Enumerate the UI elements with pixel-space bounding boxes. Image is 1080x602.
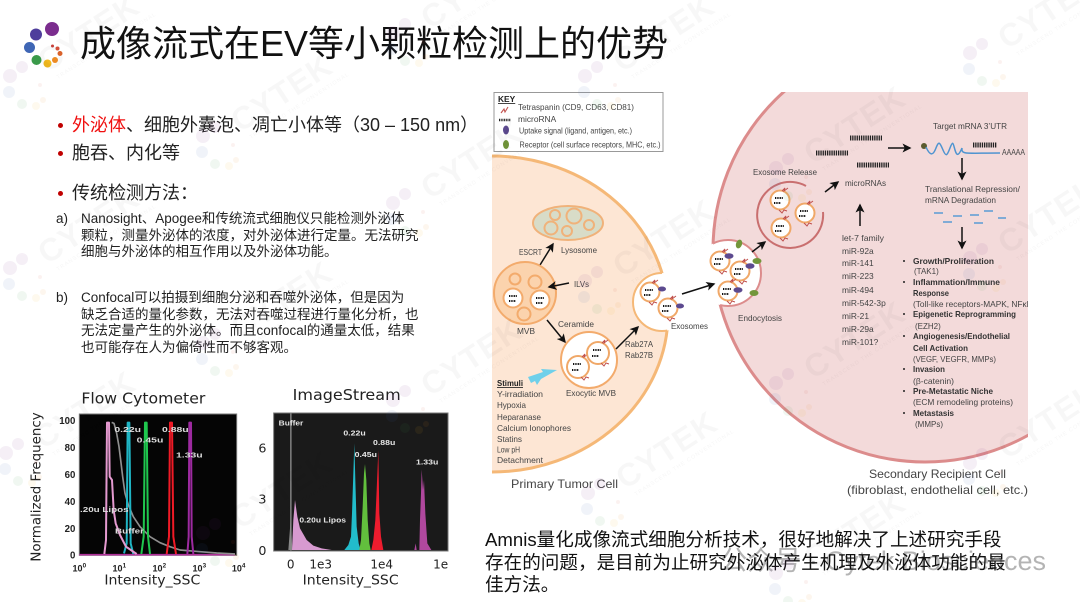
imagestream peak labels: 0.45u xyxy=(355,452,377,459)
cellular outcomes list xyxy=(903,256,1035,429)
rab27 arrow: Rab27B xyxy=(625,350,653,360)
exosome notch outline xyxy=(632,272,668,332)
source watermark: 公众号 · Cytek Biosciences xyxy=(720,546,1046,576)
cellular outcomes list: Inflammation/Immune xyxy=(913,277,1000,287)
arrow to exosome release xyxy=(752,242,765,252)
stimuli list: Y-irradiation xyxy=(497,389,543,399)
flow cytometer curves xyxy=(79,422,235,555)
imagestream peak labels: 0.20u Lipos xyxy=(299,518,346,525)
imagestream chart xyxy=(258,386,448,588)
method a text: Nanosight、Apogee和传统流式细胞仪只能检测外泌体 xyxy=(81,211,404,226)
stimuli list: Statins xyxy=(497,434,522,444)
flow cytometer peak labels: 0.22u xyxy=(114,425,141,434)
method b text: Confocal可以拍摄到细胞分泌和吞噬外泌体，但是因为 xyxy=(81,290,404,305)
ESCRT arrow xyxy=(519,244,553,265)
bullet list: 传统检测方法： xyxy=(72,183,198,203)
miRNA list: miR-223 xyxy=(842,271,874,281)
key box: Tetraspanin (CD9, CD63, CD81) xyxy=(518,102,634,112)
rab27 arrow xyxy=(616,327,653,360)
ILVs arrow xyxy=(549,279,589,289)
key box: Receptor (cell surface receptors, MHC, etc.) xyxy=(520,140,661,150)
secondary recipient cell xyxy=(712,92,1028,464)
arrow to target mRNA xyxy=(888,147,910,149)
endocytosis notch xyxy=(712,241,760,305)
flow cytometer peak labels: 0.45u xyxy=(137,436,164,445)
cellular outcomes list: (MMPs) xyxy=(915,420,943,429)
method a text xyxy=(56,211,418,259)
arrow to microRNAs xyxy=(825,182,838,192)
logo xyxy=(24,22,62,68)
flow cytometer peak labels: Buffer xyxy=(115,526,144,535)
miRNA list: miR-141 xyxy=(842,258,874,268)
flow cytometer heading: Flow Cytometer xyxy=(81,389,206,407)
flow cytometer y ticks: 40 xyxy=(65,497,75,508)
ESCRT arrow: ESCRT xyxy=(519,247,542,257)
imagestream peak labels: 0.88u xyxy=(373,440,395,447)
imagestream peak labels: 0.22u xyxy=(343,430,366,437)
key box: KEY xyxy=(498,94,516,104)
icon: stimuli lightning xyxy=(528,369,557,385)
conclusion text: Amnis量化成像流式细胞分析技术，很好地解决了上述研究手段 xyxy=(485,529,1002,550)
flow cytometer x ticks: 2 xyxy=(163,563,167,570)
stimuli list xyxy=(497,378,571,465)
imagestream histograms xyxy=(288,413,431,550)
method a text: 细胞与外泌体的相互作用以及外泌体功能。 xyxy=(81,244,338,259)
cellular outcomes list: Growth/Proliferation xyxy=(913,256,994,266)
secondary recipient cell label: (fibroblast, endothelial cell, etc.) xyxy=(847,483,1028,497)
imagestream x ticks: 1e4 xyxy=(370,558,393,572)
flow cytometer y ticks: 80 xyxy=(65,443,75,454)
key box xyxy=(494,92,663,152)
flow cytometer x ticks: 10 xyxy=(193,563,203,573)
imagestream peak labels xyxy=(279,421,438,525)
miRNA list: miR-29a xyxy=(842,324,874,334)
cellular outcomes list: (TAK1) xyxy=(914,267,939,276)
cellular outcomes list: Metastasis xyxy=(913,408,954,418)
flow cytometer x axis label: Intensity_SSC xyxy=(104,573,200,588)
cellular outcomes list: Pre-Metastatic Niche xyxy=(913,386,993,396)
imagestream y ticks: 3 xyxy=(258,492,266,507)
bullet list: 外泌体、细胞外囊泡、凋亡小体等（30 – 150 nm） xyxy=(72,115,478,135)
cellular outcomes list: (ECM remodeling proteins) xyxy=(913,397,1013,407)
imagestream plot area xyxy=(274,413,448,551)
key box: Uptake signal (ligand, antigen, etc.) xyxy=(519,126,632,136)
lysosome: Lysosome xyxy=(561,245,597,255)
endocytosis notch outline xyxy=(713,239,762,307)
imagestream x ticks: 1e3 xyxy=(309,558,332,572)
stimuli list: Detachment xyxy=(497,455,544,465)
flow cytometer x ticks: 4 xyxy=(242,563,246,570)
imagestream y ticks: 0 xyxy=(258,543,266,558)
stimuli list: Hypoxia xyxy=(497,400,526,410)
exosomes xyxy=(640,280,708,331)
flow cytometer x ticks: 10 xyxy=(73,563,83,573)
arrow to outcomes xyxy=(961,227,963,248)
conclusion text: 存在的问题，是目前为止研究外泌体产生机理及外泌体功能的最 xyxy=(485,552,1006,572)
method b text: b) xyxy=(56,290,68,305)
imagestream y ticks: 6 xyxy=(258,440,266,455)
imagestream peak labels: Buffer xyxy=(279,421,304,428)
flow cytometer y ticks: 100 xyxy=(59,416,75,427)
exosome release xyxy=(753,167,823,248)
flow cytometer chart xyxy=(30,389,246,588)
cellular outcomes list: (β-catenin) xyxy=(913,376,954,386)
cellular outcomes list: Angiogenesis/Endothelial xyxy=(913,331,1010,341)
endocytosis: Endocytosis xyxy=(738,313,782,323)
cellular outcomes list: (EZH2) xyxy=(915,322,941,331)
lysosome xyxy=(533,206,603,255)
flow cytometer peak labels: 1.33u xyxy=(176,451,203,460)
translational repression: mRNA Degradation xyxy=(925,195,996,205)
miRNA list: miR-101? xyxy=(842,337,879,347)
flow cytometer y ticks: 0 xyxy=(70,551,75,562)
microRNAs: microRNAs xyxy=(845,178,886,188)
primary tumor cell xyxy=(492,154,669,474)
flow cytometer y ticks: 20 xyxy=(65,524,75,535)
target mRNA xyxy=(921,121,1025,157)
method b text xyxy=(56,290,418,354)
bullet list xyxy=(58,115,478,203)
imagestream x axis label: Intensity_SSC xyxy=(303,573,399,588)
bullet list: 胞吞、内化等 xyxy=(72,143,180,163)
method a text: 颗粒，测量外泌体的浓度，对外泌体进行定量。无法研究 xyxy=(81,228,418,242)
flow cytometer x ticks: 10 xyxy=(153,563,163,573)
flow cytometer y ticks: 60 xyxy=(65,470,75,481)
ceramide arrow xyxy=(547,319,594,342)
imagestream peak labels: 1.33u xyxy=(416,460,438,467)
flow cytometer peak labels xyxy=(80,425,203,535)
miRNA list: miR-542-3p xyxy=(842,298,886,308)
MVB: MVB xyxy=(517,326,535,336)
translational repression: Translational Repression/ xyxy=(925,184,1021,194)
exosome biology diagram xyxy=(492,92,1028,496)
stimuli list: Calcium Ionophores xyxy=(497,423,571,433)
stimuli list: Stimuli xyxy=(497,378,523,388)
flow cytometer y ticks xyxy=(59,416,75,562)
exocytic MVB: Exocytic MVB xyxy=(566,388,616,398)
target mRNA: AAAAA xyxy=(1002,147,1025,157)
cellular outcomes list: (Toll-like receptors-MAPK, NFκB) xyxy=(913,299,1035,309)
secondary recipient cell label: Secondary Recipient Cell xyxy=(869,467,1006,481)
method b text: 缺乏合适的量化参数，无法对吞噬过程进行量化分析，也 xyxy=(81,306,418,322)
secondary recipient cell label xyxy=(847,467,1028,497)
exosomes: Exosomes xyxy=(671,321,708,331)
conclusion text xyxy=(485,529,1006,595)
arrow from miRNA list xyxy=(859,205,861,226)
cellular outcomes list: Epigenetic Reprogramming xyxy=(913,309,1016,319)
conclusion text: 佳方法。 xyxy=(485,574,559,595)
method b text: 无法定量产生的外泌体。而且confocal的通量太低，结果 xyxy=(81,323,415,338)
cellular outcomes list: Invasion xyxy=(913,364,945,374)
stimuli list: Low pH xyxy=(497,444,520,454)
flow cytometer x ticks: 1 xyxy=(123,563,127,570)
flow cytometer x ticks: 3 xyxy=(203,563,207,570)
miRNA list: miR-494 xyxy=(842,285,874,295)
method b text: 也可能存在人为偏倚性而不够客观。 xyxy=(81,340,297,354)
exocytic MVB xyxy=(561,332,617,398)
miRNA list xyxy=(842,233,886,347)
flow cytometer x ticks: 10 xyxy=(232,563,242,573)
arrow to repression xyxy=(961,158,963,179)
exosome release: Exosome Release xyxy=(753,167,817,177)
translational repression xyxy=(925,184,1021,223)
key box: microRNA xyxy=(518,114,557,124)
primary tumor cell label: Primary Tumor Cell xyxy=(511,477,618,491)
imagestream x ticks: 1e xyxy=(433,558,448,572)
ILVs arrow: ILVs xyxy=(574,279,589,289)
imagestream x ticks: 0 xyxy=(287,558,294,572)
MVB xyxy=(494,262,556,336)
flow cytometer y axis label: Normalized Frequency xyxy=(30,412,45,562)
flow cytometer x ticks xyxy=(73,563,246,573)
cellular outcomes list: Response xyxy=(913,288,949,298)
exosome release notch xyxy=(634,273,670,330)
ceramide arrow: Ceramide xyxy=(558,319,594,329)
method a text: a) xyxy=(56,211,68,226)
flow cytometer peak labels: 0.88u xyxy=(162,425,189,434)
cellular outcomes list: Cell Activation xyxy=(913,343,968,353)
flow cytometer peak labels: .20u Lipos xyxy=(80,505,129,514)
target mRNA: Target mRNA 3’UTR xyxy=(933,121,1007,131)
rab27 arrow: Rab27A xyxy=(625,339,653,349)
flow cytometer plot area xyxy=(79,414,237,555)
microRNAs xyxy=(816,138,889,188)
miRNA list: let-7 family xyxy=(842,233,885,243)
imagestream x ticks xyxy=(287,558,448,572)
stimuli list: Heparanase xyxy=(497,412,541,422)
title: 成像流式在EV等小颗粒检测上的优势 xyxy=(80,23,668,64)
imagestream y ticks xyxy=(258,440,266,558)
flow cytometer x ticks: 10 xyxy=(113,563,123,573)
miRNA list: miR-21 xyxy=(842,311,869,321)
miRNA list: miR-92a xyxy=(842,246,874,256)
flow cytometer x ticks: 0 xyxy=(83,563,87,570)
arrow to recipient cell xyxy=(682,284,714,294)
imagestream heading: ImageStream xyxy=(293,386,401,404)
endocytosis xyxy=(710,239,782,323)
cellular outcomes list: (VEGF, VEGFR, MMPs) xyxy=(913,354,996,364)
